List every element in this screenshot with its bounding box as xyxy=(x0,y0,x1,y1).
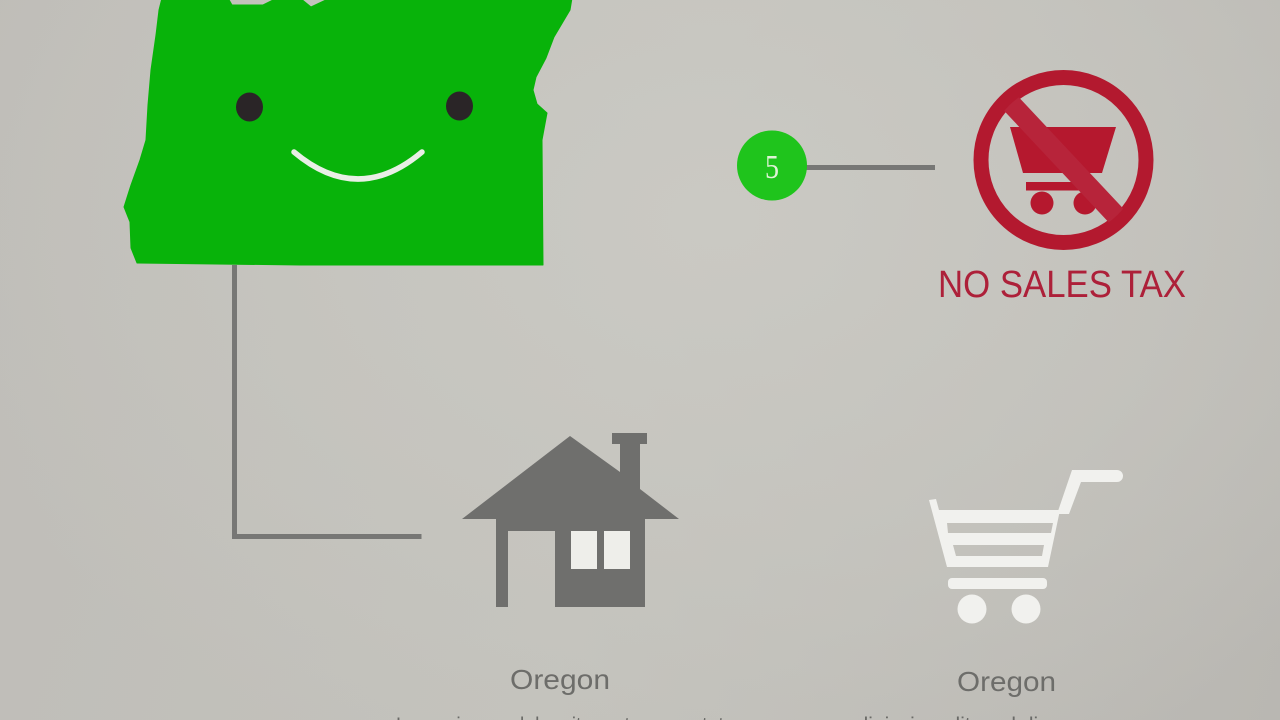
cart caption: Oregon xyxy=(957,666,1056,697)
house silhouette xyxy=(462,433,679,607)
Oregon state smiling character xyxy=(124,0,572,265)
left eye xyxy=(236,92,263,122)
smile xyxy=(294,152,422,179)
dollar badge xyxy=(737,130,807,200)
cart left wheel xyxy=(1030,192,1054,214)
left window xyxy=(571,531,597,569)
prohibition slash xyxy=(1003,95,1124,224)
icon: white shopping cart xyxy=(929,470,1123,624)
cart bar xyxy=(1026,182,1090,190)
right eye xyxy=(446,92,473,120)
connector: Oregon to house xyxy=(234,265,422,536)
cart handle xyxy=(1057,470,1123,514)
cart bar xyxy=(948,578,1047,589)
left wheel xyxy=(958,594,986,624)
house caption: Oregon xyxy=(510,664,610,695)
right window xyxy=(604,531,630,569)
no sales tax label: NO SALES TAX xyxy=(938,264,1186,306)
cart right wheel xyxy=(1074,192,1096,214)
Oregon state silhouette xyxy=(124,0,572,265)
badge symbol: 5 xyxy=(765,149,779,186)
icon: no shopping cart xyxy=(981,78,1146,242)
icon: house xyxy=(462,433,679,607)
badge circle xyxy=(737,130,807,200)
prohibition ring xyxy=(981,78,1146,242)
cart basket xyxy=(1010,127,1116,173)
right wheel xyxy=(1012,594,1040,624)
cart basket xyxy=(929,499,1060,567)
connector: dollar badge to no-sales-tax icon xyxy=(805,165,935,170)
